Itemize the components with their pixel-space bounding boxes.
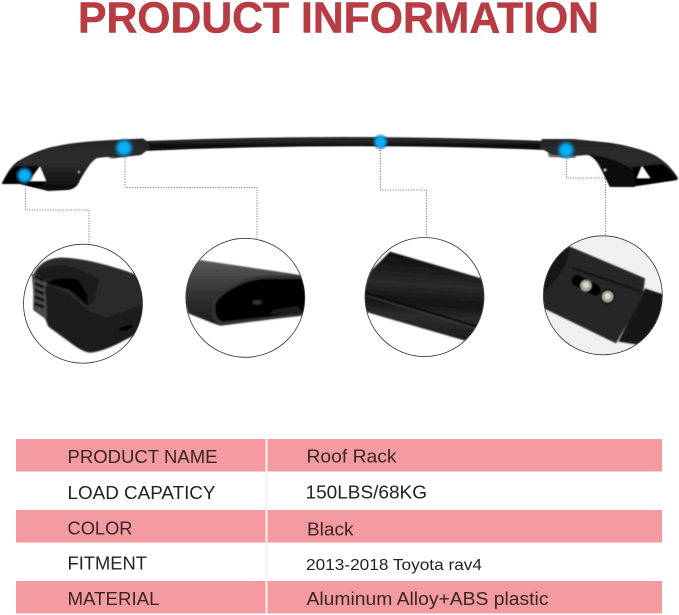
hotspot: left bracket — [114, 138, 134, 158]
hotspot: left end — [15, 166, 34, 185]
bolts — [580, 280, 614, 303]
specification table — [16, 439, 662, 614]
roof rack product illustration — [2, 137, 678, 191]
row: fitment: 2013-2018 Toyota rav4 — [306, 557, 482, 574]
row: load capacity: LOAD CAPATICY — [68, 483, 216, 503]
hotspot: bar centre — [372, 134, 389, 150]
row: product name — [68, 446, 398, 467]
row: color: Black — [307, 519, 355, 539]
row: load capacity — [68, 482, 427, 503]
detail circle: end cap — [23, 244, 145, 363]
hotspot: right bracket — [556, 140, 576, 160]
row: material: MATERIAL — [68, 589, 160, 609]
row: product name: PRODUCT NAME — [68, 447, 218, 467]
row: material: Aluminum Alloy+ABS plastic — [306, 589, 548, 609]
row: product name: Roof Rack — [306, 446, 398, 466]
detail circle: crossbar section — [362, 237, 487, 356]
dotted leader lines — [26, 150, 606, 244]
column divider — [266, 439, 268, 614]
rack crossbar — [145, 137, 545, 151]
row: color: COLOR — [68, 519, 132, 539]
row: fitment: FITMENT — [68, 553, 147, 573]
detail circle: mounting bolts — [538, 234, 665, 357]
row: fitment — [68, 553, 482, 574]
left bracket — [2, 138, 150, 191]
row: color — [68, 519, 355, 539]
row: material — [68, 589, 548, 609]
row: load capacity: 150LBS/68KG — [306, 482, 427, 502]
detail circle: tube opening — [183, 238, 308, 357]
right bracket — [540, 139, 678, 187]
row backgrounds — [16, 439, 662, 614]
